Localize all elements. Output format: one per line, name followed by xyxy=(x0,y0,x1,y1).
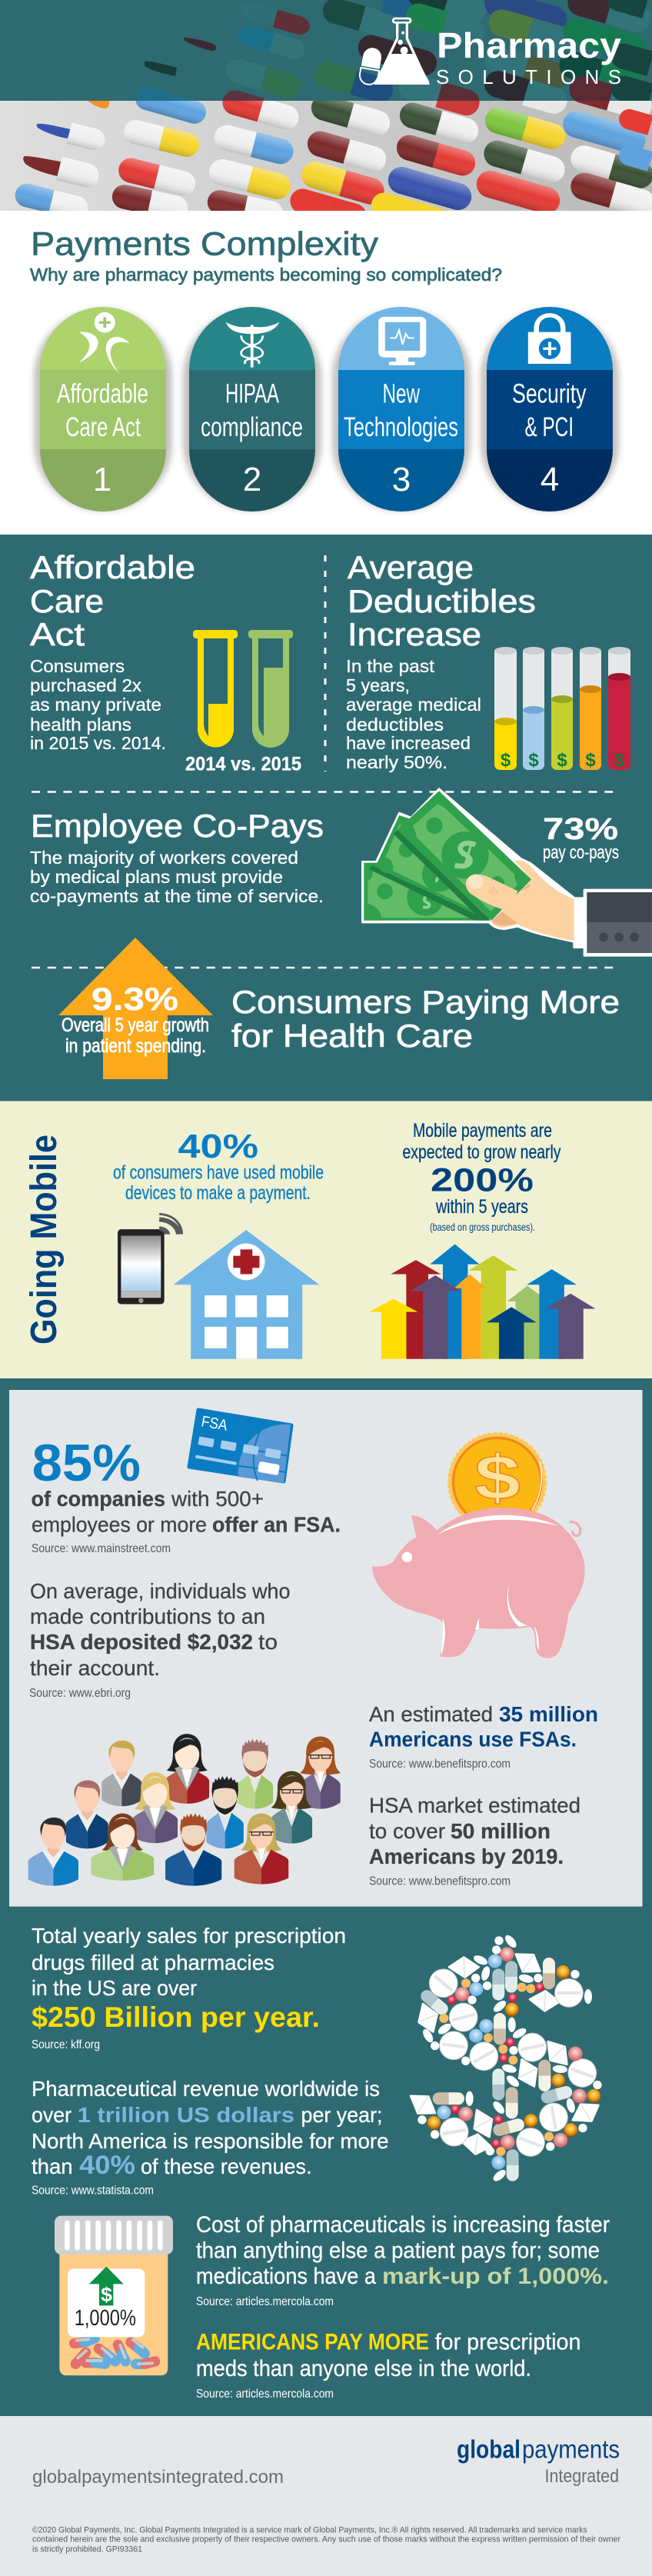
americans pay more text xyxy=(196,2329,581,2381)
heading: for Health Care xyxy=(231,1018,473,1054)
heading xyxy=(348,549,536,652)
icon: FSA card xyxy=(189,1410,291,1483)
label: & PCI xyxy=(524,412,574,442)
forecast text: expected to grow nearly xyxy=(403,1141,561,1163)
website: globalpaymentsintegrated.com xyxy=(32,2467,284,2488)
pill 4: Security & PCI xyxy=(481,307,619,512)
cuff and sleeve xyxy=(574,892,652,953)
stat label: in patient spending. xyxy=(65,1035,206,1057)
header band xyxy=(0,0,652,211)
forecast text: Mobile payments are xyxy=(413,1120,552,1141)
legal text: ©2020 Global Payments, Inc. Global Payments Integrated is a service mark of Global Payments, Inc.® All rights reserved. All trademarks and service marks xyxy=(32,2526,587,2535)
stat text xyxy=(113,1161,324,1204)
heading: Consumers Paying More xyxy=(231,984,620,1020)
body text: health plans xyxy=(30,715,131,735)
chart: deductible tubes: $ xyxy=(614,750,625,771)
body text: nearly 50%. xyxy=(346,752,447,772)
heading xyxy=(231,984,620,1054)
title: Payments Complexity: Payments Complexity xyxy=(31,226,379,263)
americans pay more text: for prescription xyxy=(435,2329,581,2355)
panel: teal backing for FSA and sales xyxy=(0,1378,652,2416)
icon: pill bottle xyxy=(55,2216,173,2375)
HSA market text: Americans by 2019. xyxy=(369,1845,564,1868)
icon: smartphone xyxy=(118,1214,181,1305)
panel: pharmaceutical costs xyxy=(55,2212,610,2401)
revenue text: 40% xyxy=(79,2151,135,2180)
HSA market text: to cover xyxy=(369,1819,445,1843)
panel: FSA and HSA xyxy=(9,1390,643,1907)
illustration: dollar sign of pills xyxy=(405,1933,604,2183)
revenue text: than xyxy=(32,2154,73,2178)
FSA usage text: Americans use FSAs. xyxy=(369,1728,577,1751)
forecast text: within 5 years xyxy=(435,1196,528,1218)
revenue text: over xyxy=(32,2103,72,2127)
stat 85%: 85% xyxy=(32,1434,141,1492)
source: Source: articles.mercola.com xyxy=(196,2295,334,2308)
panel: employee co-pays xyxy=(30,789,652,955)
logo: global payments: payments xyxy=(522,2435,620,2464)
panel: footer xyxy=(0,2416,652,2576)
stat 9.3%: 9.3% xyxy=(91,981,178,1017)
label: HIPAA xyxy=(225,378,279,409)
icon: coin xyxy=(448,1433,546,1531)
forecast text xyxy=(403,1120,561,1233)
number: 4 xyxy=(541,461,559,498)
icon: orange up arrow xyxy=(58,938,213,1079)
revenue text xyxy=(32,2077,389,2180)
icon: hospital xyxy=(174,1230,319,1359)
HSA text: their account. xyxy=(30,1656,160,1680)
FSA usage text: 35 million xyxy=(499,1702,598,1726)
front bill xyxy=(398,791,531,921)
panel: going mobile xyxy=(0,1101,652,1378)
body text: Consumers xyxy=(30,656,125,676)
logo: global payments: Integrated xyxy=(544,2466,619,2487)
full colour pills xyxy=(15,101,652,211)
heading: Care xyxy=(30,583,104,619)
stat text: devices to make a payment. xyxy=(125,1182,311,1204)
source: Source: articles.mercola.com xyxy=(196,2388,334,2401)
HSA market text: HSA market estimated xyxy=(369,1794,580,1817)
revenue text: per year; xyxy=(301,2103,383,2127)
HSA text: On average, individuals who xyxy=(30,1579,291,1603)
heading: Increase xyxy=(348,616,481,652)
sales figure: $250 Billion per year. xyxy=(32,2001,320,2033)
chart: deductible tubes: $ xyxy=(528,750,539,771)
revenue text: North America is responsible for more xyxy=(32,2129,389,2153)
dimmed pills in teal band xyxy=(135,0,652,101)
HSA text: HSA deposited $2,032 xyxy=(30,1630,253,1654)
heading: Going Mobile xyxy=(24,1135,65,1345)
number: 3 xyxy=(392,461,411,498)
stat text: of consumers have used mobile xyxy=(113,1161,324,1183)
source: Source: kff.org xyxy=(32,2038,100,2051)
icon: caduceus xyxy=(226,322,279,368)
white outline xyxy=(362,789,652,955)
stat text: offer an FSA. xyxy=(212,1513,341,1537)
forecast text: (based on gross purchases). xyxy=(430,1221,535,1233)
chart: deductible tubes: $ xyxy=(501,750,511,771)
americans pay more text: meds than anyone else in the world. xyxy=(196,2356,531,2381)
stat text xyxy=(31,1487,341,1537)
body text xyxy=(346,656,481,772)
legal text xyxy=(32,2526,620,2554)
panel: prescription sales xyxy=(32,1924,604,2197)
label: compliance xyxy=(201,412,303,442)
body text: The majority of workers covered xyxy=(30,848,298,868)
logo wordmark: Pharmacy xyxy=(437,25,621,65)
body text: as many private xyxy=(30,695,161,715)
body text: deductibles xyxy=(346,715,444,735)
panel: teal consumer costs section xyxy=(0,535,652,1101)
body text: 5 years, xyxy=(346,675,410,695)
pill 3: New Technologies xyxy=(332,307,471,512)
chart: deductible tubes: $ xyxy=(585,750,596,771)
heading: Deductibles xyxy=(348,583,536,619)
label xyxy=(57,378,148,442)
body text: in 2015 vs. 2014. xyxy=(30,733,166,753)
icon: padlock xyxy=(528,315,571,364)
FSA usage text xyxy=(369,1702,598,1751)
cost text: mark-up of 1,000%. xyxy=(382,2264,609,2289)
cost text xyxy=(196,2212,610,2289)
stat label: pay co-pays xyxy=(543,842,619,863)
panel: consumers paying more xyxy=(58,938,620,1079)
body text: purchased 2x xyxy=(30,675,142,695)
label: Security xyxy=(512,378,587,409)
cost text: than anything else a patient pays for; some xyxy=(196,2238,600,2263)
legal text: contained herein are the sole and exclusive property of their respective owners. Any such use of those marks without the express written permission of their owner xyxy=(32,2535,620,2544)
stat label xyxy=(62,1015,209,1057)
chart: deductible tubes: $ xyxy=(557,750,567,771)
hand xyxy=(491,860,574,941)
chart: deductible tubes xyxy=(494,647,630,771)
logo: Pharmacy Solutions xyxy=(358,18,621,88)
chart: growth arrows xyxy=(369,1244,595,1359)
panel: average deductibles xyxy=(346,549,630,772)
label xyxy=(512,378,587,442)
pill 2: HIPAA compliance xyxy=(183,307,321,512)
back bill xyxy=(364,863,490,921)
cost text: Cost of pharmaceuticals is increasing faster xyxy=(196,2212,610,2238)
revenue text: of these revenues. xyxy=(141,2154,312,2178)
stat text: with 500+ xyxy=(171,1487,264,1511)
label xyxy=(201,378,303,442)
icon: monitor xyxy=(378,317,426,365)
bottle label: 1,000% xyxy=(75,2306,136,2331)
logo: global payments: global xyxy=(457,2435,521,2464)
source: Source: www.statista.com xyxy=(32,2184,154,2197)
source: Source: www.benefitspro.com xyxy=(369,1875,511,1888)
heading: Average xyxy=(348,549,474,585)
number: 2 xyxy=(243,461,261,498)
heading xyxy=(30,549,195,652)
pill 1: Affordable Care Act xyxy=(34,307,172,512)
sales text: in the US are over xyxy=(32,1976,197,2000)
FSA usage text: An estimated xyxy=(369,1702,493,1726)
label: Affordable xyxy=(57,378,148,409)
body text: In the past xyxy=(346,656,435,676)
HSA market text xyxy=(369,1794,580,1868)
stat text: employees or more xyxy=(32,1513,207,1537)
illustration: group of people xyxy=(28,1734,341,1886)
icon: piggy bank xyxy=(372,1508,585,1658)
label: Technologies xyxy=(344,412,458,442)
chart caption: 2014 vs. 2015 xyxy=(185,754,301,775)
logo tagline: SOLUTIONS xyxy=(436,65,621,88)
label: New xyxy=(383,378,420,409)
heading: Employee Co-Pays xyxy=(31,808,324,844)
HSA text xyxy=(30,1579,291,1680)
sales text: Total yearly sales for prescription xyxy=(32,1924,346,1948)
stat text: of companies xyxy=(31,1487,165,1511)
bottle arrow dollar: $ xyxy=(101,2283,113,2306)
body text: have increased xyxy=(346,733,471,753)
americans pay more text: AMERICANS PAY MORE xyxy=(196,2329,429,2355)
coin dollar sign: $ xyxy=(474,1443,521,1513)
revenue text: 1 trillion US dollars xyxy=(78,2103,294,2127)
label xyxy=(344,378,458,442)
subtitle: Why are pharmacy payments becoming so complicated? xyxy=(30,265,502,285)
middle bill xyxy=(375,815,497,918)
source: Source: www.mainstreet.com xyxy=(32,1542,171,1555)
source: Source: www.benefitspro.com xyxy=(369,1758,511,1771)
body text: by medical plans must provide xyxy=(30,867,283,887)
chart: test tubes xyxy=(193,630,293,748)
number: 1 xyxy=(93,461,111,498)
heading: Act xyxy=(30,616,85,652)
source: Source: www.ebri.org xyxy=(29,1687,131,1700)
stat label: Overall 5 year growth xyxy=(62,1015,209,1036)
legal text: is strictly prohibited. GPI93361 xyxy=(32,2544,142,2554)
HSA market text: 50 million xyxy=(451,1819,551,1843)
sales text xyxy=(32,1924,346,2000)
HSA text: to xyxy=(258,1630,278,1654)
icon: hand holding cash xyxy=(362,789,652,955)
stat 73%: 73% xyxy=(543,812,618,846)
body text: co-payments at the time of service. xyxy=(30,886,324,906)
heading: Affordable xyxy=(30,549,195,585)
revenue text: Pharmaceutical revenue worldwide is xyxy=(32,2077,380,2101)
body text xyxy=(30,848,324,906)
icon: care person xyxy=(79,312,130,375)
icon: flask and capsule xyxy=(358,18,429,86)
body text: average medical xyxy=(346,695,481,715)
sales text: drugs filled at pharmacies xyxy=(32,1951,274,1974)
body text xyxy=(30,656,166,753)
stat 40%: 40% xyxy=(178,1128,258,1165)
label: Care Act xyxy=(65,412,141,442)
icon: FSA card: FSA xyxy=(200,1413,229,1435)
HSA text: made contributions to an xyxy=(30,1605,265,1628)
panel: affordable care act xyxy=(30,549,301,775)
forecast text: 200% xyxy=(431,1161,534,1198)
logo: global payments xyxy=(457,2435,620,2487)
cost text: medications have a xyxy=(196,2264,376,2289)
